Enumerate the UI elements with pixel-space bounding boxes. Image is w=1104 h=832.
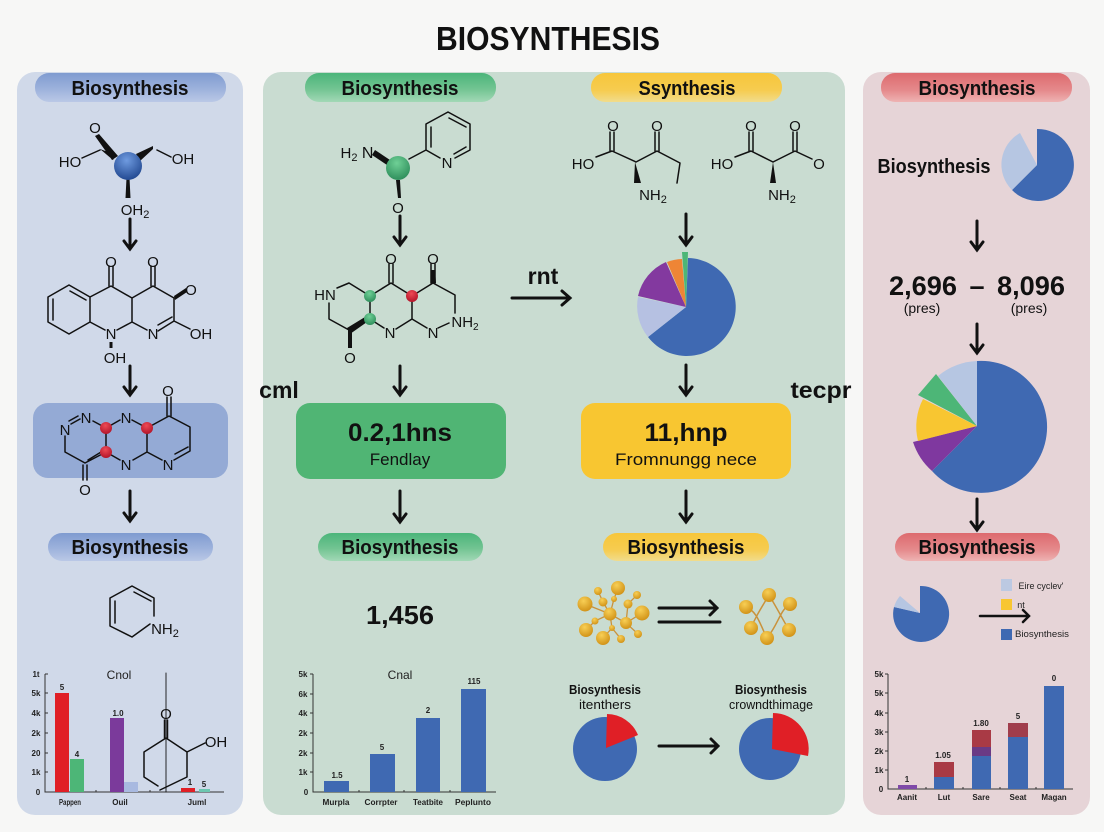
molecule: tricyclic intermediate bbox=[48, 254, 212, 367]
arrow: right bbox=[512, 291, 570, 305]
molecule: overlay ketone ring: OH bbox=[205, 734, 227, 751]
heading pill: left bbox=[35, 73, 226, 102]
molecule: green and red atom intermediate: N bbox=[385, 325, 395, 342]
molecule: blue sphere precursor: HO bbox=[59, 154, 81, 171]
label: pie left: Biosynthesis bbox=[569, 683, 641, 697]
molecule: overlay ketone ring: O bbox=[160, 706, 172, 723]
bar chart: right stacked: 5k bbox=[875, 670, 884, 679]
callout: yellow metric box: Fromnungg nece bbox=[615, 450, 757, 469]
bar chart: right stacked: 2k bbox=[875, 747, 884, 756]
bar chart: centre: 6k bbox=[299, 690, 308, 699]
bar chart: centre: 5 bbox=[380, 743, 385, 752]
bar chart: right stacked: 1.80 bbox=[973, 719, 989, 728]
molecule: blue sphere precursor: O bbox=[89, 120, 101, 137]
bar chart: centre: 2 bbox=[426, 706, 431, 715]
metric range: – bbox=[969, 271, 985, 301]
callout: yellow metric box: 11,hnp bbox=[644, 419, 728, 447]
bar chart: right stacked: 0 bbox=[879, 785, 884, 794]
bar chart: right stacked: Lut bbox=[938, 793, 951, 802]
highlighted molecule box: N bbox=[60, 422, 70, 439]
callout: green metric box: Fendlay bbox=[370, 450, 431, 469]
bar chart: left: 2k bbox=[32, 729, 41, 738]
molecule: green and red atom intermediate: HN bbox=[314, 287, 336, 304]
molecule: amino acid right: HO bbox=[711, 156, 733, 173]
molecule: tricyclic intermediate: OH bbox=[190, 326, 212, 343]
bar chart: right stacked: 4k bbox=[875, 709, 884, 718]
molecule: tricyclic intermediate: N bbox=[148, 326, 158, 343]
molecule: green and red atom intermediate: 2 bbox=[473, 322, 479, 333]
icon: gold ring cluster bbox=[739, 588, 797, 645]
metric range: (pres) bbox=[1011, 300, 1047, 316]
heading pill: left: Biosynthesis bbox=[72, 78, 188, 100]
bar chart: centre: Peplunto bbox=[455, 798, 491, 807]
molecule: ring amine: 2 bbox=[173, 628, 179, 640]
molecule: tricyclic intermediate: OH bbox=[104, 350, 126, 367]
arrow: down bbox=[124, 491, 136, 521]
highlighted molecule box: N bbox=[121, 410, 131, 427]
title: BIOSYNTHESIS bbox=[436, 20, 660, 57]
arrow: down bbox=[680, 365, 692, 395]
bar chart: right stacked: 3k bbox=[875, 728, 884, 737]
molecule: amino acid left: 2 bbox=[661, 194, 667, 206]
pie chart: centre bbox=[637, 252, 736, 356]
molecule: green sphere amine pyridine: N bbox=[357, 145, 373, 162]
bar chart: left: 20 bbox=[32, 749, 41, 758]
arrow: down bbox=[971, 221, 983, 250]
molecule: blue sphere precursor bbox=[59, 120, 194, 221]
arrow: down bbox=[680, 491, 692, 522]
arrow: down bbox=[971, 499, 983, 530]
highlighted molecule box: N bbox=[163, 457, 173, 474]
heading pill: yellow bbox=[591, 73, 782, 102]
bar chart: left bbox=[32, 668, 224, 807]
bar chart: left: 5 bbox=[202, 780, 207, 789]
molecule: green and red atom intermediate: O bbox=[385, 251, 397, 268]
heading pill: red bbox=[881, 73, 1072, 102]
pie chart: large right bbox=[913, 361, 1047, 493]
legend: Biosynthesis bbox=[1015, 629, 1069, 640]
label: pie left: itenthers bbox=[579, 698, 631, 712]
bar chart: centre: 5k bbox=[299, 670, 308, 679]
bar chart: left: Cnol bbox=[107, 668, 131, 682]
molecule: green and red atom intermediate: NH bbox=[451, 314, 473, 331]
molecule: green sphere amine pyridine: H bbox=[341, 145, 351, 162]
molecule: tricyclic intermediate: O bbox=[105, 254, 117, 271]
molecule: ring amine bbox=[110, 586, 179, 640]
callout: green metric box bbox=[296, 403, 506, 479]
side label: rnt: rnt bbox=[528, 263, 559, 289]
bar chart: centre: 1.5 bbox=[331, 771, 343, 780]
bar chart: centre: 2k bbox=[299, 729, 308, 738]
bar chart: left: Ouil bbox=[112, 798, 128, 807]
arrow: right bbox=[980, 610, 1029, 622]
heading pill: left lower: Biosynthesis bbox=[72, 537, 188, 559]
legend: nt bbox=[1017, 600, 1025, 610]
bar chart: left: 1.0 bbox=[112, 709, 124, 718]
bar chart: centre: 4k bbox=[299, 709, 308, 718]
molecule: overlay ketone ring bbox=[144, 673, 227, 792]
arrow: down bbox=[124, 366, 136, 395]
bar chart: centre: Teatbite bbox=[413, 798, 444, 807]
label: pie left bbox=[569, 683, 641, 712]
side label: cml: cml bbox=[259, 377, 299, 403]
arrow: down bbox=[971, 324, 983, 353]
metric range: 2,696 bbox=[889, 271, 957, 301]
legend bbox=[1001, 579, 1069, 640]
pie chart: small red slice bbox=[573, 714, 638, 781]
molecule: tricyclic intermediate: O bbox=[147, 254, 159, 271]
pie chart: small right bbox=[893, 586, 949, 642]
molecule: amino acid right: 2 bbox=[790, 194, 796, 206]
heading pill: red: Biosynthesis bbox=[918, 78, 1036, 100]
arrow: right bbox=[659, 739, 718, 753]
bar chart: left: 1 bbox=[188, 778, 193, 787]
bar chart: right stacked: Magan bbox=[1041, 793, 1067, 802]
big number: 1,456 bbox=[366, 600, 434, 630]
molecule: green and red atom intermediate: N bbox=[428, 325, 438, 342]
panel: left blue column bbox=[17, 72, 243, 815]
bar chart: right stacked: 1k bbox=[875, 766, 884, 775]
heading pill: green bbox=[305, 73, 496, 102]
metric range bbox=[889, 271, 1065, 316]
legend: Eire cyclev' bbox=[1018, 581, 1064, 592]
bar chart: centre: 1k bbox=[299, 768, 308, 777]
molecule: amino acid left: O bbox=[651, 118, 663, 135]
molecule: green and red atom intermediate: O bbox=[427, 251, 439, 268]
bar chart: right stacked: Sare bbox=[972, 793, 990, 802]
molecule: blue sphere precursor: OH bbox=[172, 151, 194, 168]
molecule: green and red atom intermediate: O bbox=[344, 350, 356, 367]
bar chart: right stacked: 5 bbox=[1016, 712, 1021, 721]
callout: yellow metric box bbox=[581, 403, 791, 479]
molecule: amino acid left: O bbox=[607, 118, 619, 135]
heading pill: yellow lower: Biosynthesis bbox=[628, 537, 744, 559]
metric range: (pres) bbox=[904, 300, 940, 316]
label: pie right: Biosynthesis bbox=[735, 683, 807, 697]
molecule: amino acid right bbox=[711, 118, 825, 206]
molecule: ring amine: NH bbox=[151, 621, 173, 638]
callout: green metric box: 0.2,1hns bbox=[348, 419, 452, 447]
bar chart: left: Juml bbox=[188, 798, 206, 807]
highlighted molecule box: N bbox=[81, 410, 91, 427]
bar chart: centre: 2k bbox=[299, 749, 308, 758]
label: pie right: crowndthimage bbox=[729, 698, 813, 712]
molecule: amino acid left: NH bbox=[639, 187, 661, 204]
panel: centre green column bbox=[259, 72, 852, 815]
arrow: down bbox=[124, 219, 136, 249]
bar chart: left: 4k bbox=[32, 709, 41, 718]
molecule: blue sphere precursor: OH bbox=[121, 202, 143, 219]
bar chart: centre bbox=[299, 668, 496, 807]
arrows: equilibrium bbox=[659, 601, 720, 622]
heading pill: left lower bbox=[48, 533, 213, 561]
molecule: amino acid right: O bbox=[745, 118, 757, 135]
molecule: amino acid left: HO bbox=[572, 156, 594, 173]
arrow: down bbox=[394, 491, 406, 522]
bar chart: right stacked: 1.05 bbox=[935, 751, 951, 760]
bar chart: right stacked: 1 bbox=[905, 775, 910, 784]
highlighted molecule box bbox=[33, 383, 228, 499]
molecule: amino acid left bbox=[572, 118, 680, 206]
pie chart: top right bbox=[1001, 129, 1074, 201]
molecule: amino acid right: O bbox=[813, 156, 825, 173]
panel: right red column bbox=[863, 72, 1090, 815]
bar chart: left: 1k bbox=[32, 768, 41, 777]
heading pill: green: Biosynthesis bbox=[342, 78, 458, 100]
molecule: green and red atom intermediate bbox=[314, 251, 479, 367]
bar chart: centre: Corrpter bbox=[364, 798, 398, 807]
side label: tecpr: tecpr bbox=[790, 377, 852, 403]
molecule: amino acid right: NH bbox=[768, 187, 790, 204]
heading pill: green lower: Biosynthesis bbox=[342, 537, 458, 559]
molecule: tricyclic intermediate: O bbox=[185, 282, 197, 299]
label: biosynthesis: Biosynthesis bbox=[878, 156, 990, 178]
bar chart: centre: Murpla bbox=[322, 798, 350, 807]
metric range: 8,096 bbox=[997, 271, 1065, 301]
bar chart: left: Pappen bbox=[59, 798, 81, 807]
molecule: blue sphere precursor: 2 bbox=[143, 209, 149, 221]
molecule: amino acid right: O bbox=[789, 118, 801, 135]
heading pill: yellow: Ssynthesis bbox=[638, 78, 736, 100]
bar chart: left: 4 bbox=[75, 750, 80, 759]
arrow: down bbox=[680, 214, 692, 245]
molecule: green sphere amine pyridine: N bbox=[442, 155, 452, 172]
bar chart: right stacked: Aanit bbox=[897, 793, 917, 802]
bar chart: right stacked: Seat bbox=[1010, 793, 1027, 802]
molecule: green sphere amine pyridine: O bbox=[392, 200, 404, 217]
molecule: green sphere amine pyridine: 2 bbox=[351, 152, 357, 164]
highlighted molecule box: O bbox=[79, 482, 91, 499]
icon: gold nanoparticle cluster bbox=[578, 581, 650, 645]
bar chart: left: 0 bbox=[36, 788, 41, 797]
highlighted molecule box: N bbox=[121, 457, 131, 474]
molecule: tricyclic intermediate: N bbox=[106, 326, 116, 343]
bar chart: centre: Cnal bbox=[388, 668, 412, 682]
bar chart: centre: 115 bbox=[468, 677, 481, 686]
heading pill: red lower bbox=[895, 533, 1060, 561]
pie chart: large red slice bbox=[739, 713, 809, 780]
heading pill: red lower: Biosynthesis bbox=[918, 537, 1036, 559]
arrow: down bbox=[394, 216, 406, 245]
bar chart: left: 5 bbox=[60, 683, 65, 692]
bar chart: left: 1t bbox=[32, 670, 40, 679]
bar chart: right stacked bbox=[875, 670, 1073, 802]
label: pie right bbox=[729, 683, 813, 712]
heading pill: green lower bbox=[318, 533, 483, 561]
bar chart: centre: 0 bbox=[304, 788, 309, 797]
bar chart: right stacked: 0 bbox=[1052, 674, 1057, 683]
heading pill: yellow lower bbox=[603, 533, 769, 561]
bar chart: right stacked: 5k bbox=[875, 689, 884, 698]
arrow: down bbox=[394, 366, 406, 395]
highlighted molecule box: O bbox=[162, 383, 174, 400]
molecule: green sphere amine pyridine bbox=[341, 112, 470, 217]
bar chart: left: 5k bbox=[32, 689, 41, 698]
